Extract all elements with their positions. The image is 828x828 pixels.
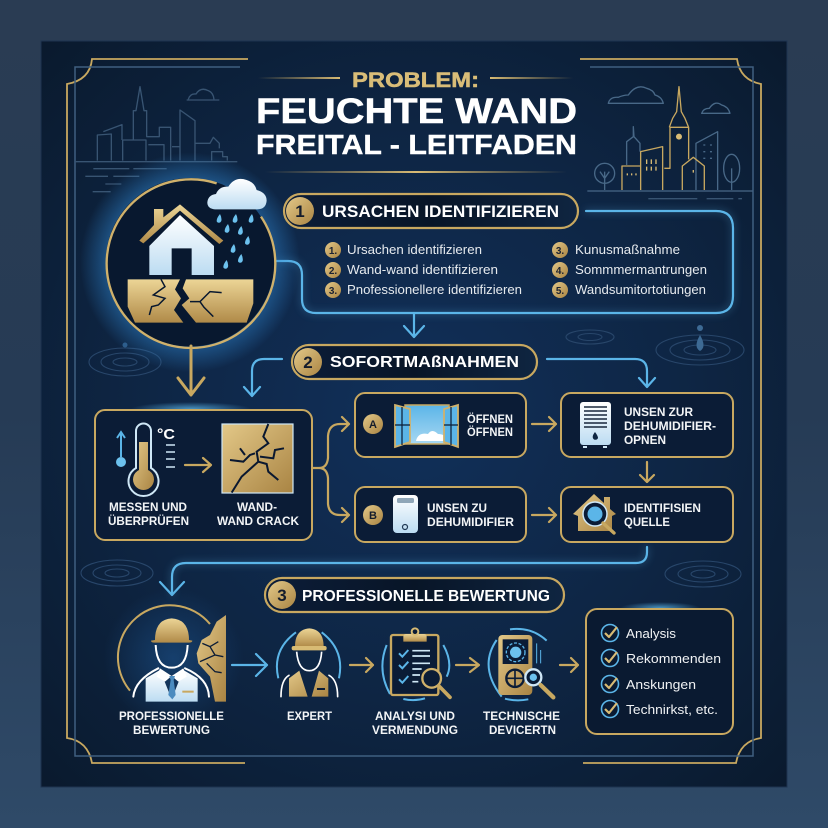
icons: professional and expert xyxy=(103,588,340,728)
icons: clipboard and device xyxy=(382,628,553,700)
arrow: measure to crack xyxy=(185,458,211,472)
icon: technical device xyxy=(489,629,553,700)
badge: step 2 heading: 2 xyxy=(303,353,313,372)
title: FREITAL - LEITFADEN xyxy=(256,129,577,160)
causes list: Kunusmaßnahme xyxy=(575,243,680,257)
panel: dehumidifier: OPNEN xyxy=(624,435,666,447)
causes list: Pnofessionellere identifizieren xyxy=(347,283,522,297)
panel: dehumidifier: DEHUMIDIFIER- xyxy=(624,421,716,433)
icon: professional with cracked wall xyxy=(103,588,243,728)
title xyxy=(256,69,577,173)
arrow: A to dehumidifier xyxy=(532,417,556,431)
title: FEUCHTE WAND xyxy=(256,92,577,131)
panel: checklist: Rekommenden xyxy=(626,651,721,666)
panel: measure and crack: ÜBERPRÜFEN xyxy=(108,515,189,528)
arrow: blue to measuring box xyxy=(244,359,282,396)
panel: measure and crack: WAND CRACK xyxy=(217,516,300,528)
labels: step 3 icons: BEWERTUNG xyxy=(133,725,210,737)
icon: expert xyxy=(277,628,340,697)
panel: dehumidifier xyxy=(561,393,733,457)
arrow: dehumidifier to source xyxy=(640,462,654,482)
panel: measure and crack: MESSEN UND xyxy=(109,502,187,514)
arrow: device to checklist xyxy=(560,658,578,672)
arrow: blue to dehumidifier box xyxy=(547,359,655,387)
labels: step 3 icons xyxy=(119,711,560,737)
icon: house with magnifier xyxy=(573,494,616,533)
panel: option B xyxy=(355,487,526,542)
connector: fork to A and B xyxy=(313,417,349,522)
causes list xyxy=(325,242,707,298)
arrow: gold down from house xyxy=(178,346,204,395)
icon: thermometer xyxy=(116,424,175,496)
panel: option B: UNSEN ZU xyxy=(427,503,487,515)
causes list: 2. xyxy=(329,266,337,277)
panel: option A: ÖFFNEN xyxy=(467,426,513,439)
causes list: 5. xyxy=(556,286,564,297)
panel: option B: B xyxy=(369,510,377,522)
arrow: analysis to device xyxy=(456,658,479,672)
arrow: expert to analysis xyxy=(350,658,373,672)
icon: open window xyxy=(395,405,458,447)
labels: step 3 icons: VERMENDUNG xyxy=(372,725,458,737)
causes list: Wand-wand identifizieren xyxy=(347,263,498,277)
flow line: step 2 to step 3 xyxy=(160,547,647,595)
panel: checklist xyxy=(586,609,733,734)
causes list: Sommmermantrungen xyxy=(575,263,707,277)
glow: above measuring panel xyxy=(131,402,251,416)
causes list: 4. xyxy=(556,266,564,277)
causes list: 3. xyxy=(556,246,564,257)
panel: option A: ÖFFNEN xyxy=(467,413,513,426)
labels: step 3 icons: EXPERT xyxy=(287,711,332,723)
labels: step 3 icons: TECHNISCHE xyxy=(483,711,560,723)
panel: identify source: QUELLE xyxy=(624,517,670,529)
panel: measure and crack xyxy=(95,410,312,540)
causes list: 1. xyxy=(329,246,337,257)
icon: dehumidifier xyxy=(580,402,611,448)
badge: step 2 heading: SOFORTMAßNAHMEN xyxy=(330,354,519,371)
icon: thermometer: °C xyxy=(157,426,175,443)
labels: step 3 icons: DEVICERTN xyxy=(489,725,556,737)
panel: checklist: Technirkst, etc. xyxy=(626,702,718,717)
skyline: right xyxy=(587,87,753,199)
panel: option A xyxy=(355,393,526,457)
panel: identify source xyxy=(561,487,733,542)
causes list: Wandsumitortotiungen xyxy=(575,283,706,297)
badge: step 3 heading: PROFESSIONELLE BEWERTUNG xyxy=(302,588,550,605)
badge: step 1 heading xyxy=(284,194,578,228)
causes list: Ursachen identifizieren xyxy=(347,243,482,257)
labels: step 3 icons: ANALYSI UND xyxy=(375,711,455,723)
icon: dehumidifier small xyxy=(393,495,418,533)
glow: above checklist xyxy=(620,602,700,614)
panel: checklist: Analysis xyxy=(626,626,677,641)
ornamental frame xyxy=(67,59,761,763)
flow line: step 1 to step 2 xyxy=(276,211,733,337)
panel: option A: A xyxy=(369,419,377,431)
badge: step 3 heading: 3 xyxy=(277,586,287,605)
badge: step 3 heading xyxy=(265,578,564,612)
panel: checklist: Anskungen xyxy=(626,677,696,692)
icon: house with cracked ground and rain xyxy=(80,152,300,372)
panel: option B: DEHUMIDIFIER xyxy=(427,517,515,529)
panel: identify source: IDENTIFISIEN xyxy=(624,503,701,515)
title: PROBLEM: xyxy=(352,69,479,92)
badge: step 1 heading: 1 xyxy=(295,202,305,221)
icon: clipboard with magnifier xyxy=(382,628,450,700)
ripples xyxy=(81,325,744,587)
skyline: left xyxy=(75,87,237,192)
icon: cracked wall xyxy=(222,424,293,493)
arrow: B to source xyxy=(532,508,556,522)
labels: step 3 icons: PROFESSIONELLE xyxy=(119,711,224,723)
causes list: 3. xyxy=(329,286,337,297)
panel: measure and crack: WAND- xyxy=(237,502,277,514)
panel: dehumidifier: UNSEN ZUR xyxy=(624,407,694,419)
badge: step 1 heading: URSACHEN IDENTIFIZIEREN xyxy=(322,203,559,221)
badge: step 2 heading xyxy=(292,345,537,379)
arrow: professional to expert xyxy=(232,654,267,676)
